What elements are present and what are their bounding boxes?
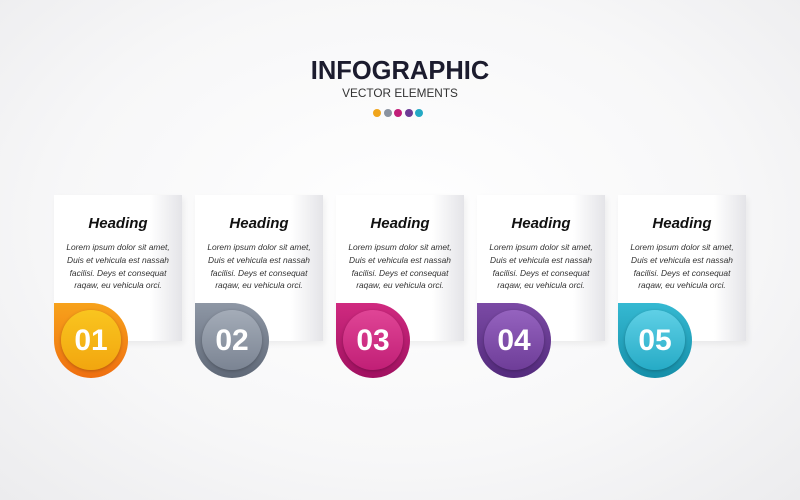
badge: 04: 04	[497, 324, 531, 357]
panel: step 3: Lorem ipsum dolor sit amet,	[348, 242, 452, 252]
panel: step 4: raqaw, eu vehicula orci.	[497, 280, 585, 290]
panel: step 5: Duis et vehicula est nassah	[631, 255, 733, 265]
badge: 01	[54, 303, 128, 378]
panel: step 1: Duis et vehicula est nassah	[67, 255, 169, 265]
panel: step 1: facilisi. Deys et consequat	[70, 268, 166, 278]
panel: step 4: Heading	[511, 215, 571, 232]
panel: step 2: facilisi. Deys et consequat	[211, 268, 307, 278]
panel: step 2: Heading	[229, 215, 289, 232]
panel: step 5	[618, 195, 746, 341]
panel: step 1: Lorem ipsum dolor sit amet,	[66, 242, 170, 252]
panel: step 1: raqaw, eu vehicula orci.	[74, 280, 162, 290]
color dots	[373, 109, 423, 117]
badge: 03: 03	[356, 324, 390, 357]
panel: step 5: facilisi. Deys et consequat	[634, 268, 730, 278]
panel: step 3: raqaw, eu vehicula orci.	[356, 280, 444, 290]
panel: step 2: raqaw, eu vehicula orci.	[215, 280, 303, 290]
badge: 05: 05	[638, 324, 672, 357]
panel: step 5: raqaw, eu vehicula orci.	[638, 280, 726, 290]
badge: 01: 01	[74, 324, 108, 357]
panel: step 2: Lorem ipsum dolor sit amet,	[207, 242, 311, 252]
panel: step 3: Heading	[370, 215, 430, 232]
panel: step 1: Heading	[88, 215, 148, 232]
panel: step 1	[54, 195, 182, 341]
panel: step 4	[477, 195, 605, 341]
badge: 04	[477, 303, 551, 378]
panel: step 2: Duis et vehicula est nassah	[208, 255, 310, 265]
panel: step 5: Lorem ipsum dolor sit amet,	[630, 242, 734, 252]
panel: step 4: Lorem ipsum dolor sit amet,	[489, 242, 593, 252]
panel: step 4: Duis et vehicula est nassah	[490, 255, 592, 265]
panel: step 3	[336, 195, 464, 341]
panel: step 3: Duis et vehicula est nassah	[349, 255, 451, 265]
panel: step 5: Heading	[652, 215, 712, 232]
panel: step 3: facilisi. Deys et consequat	[352, 268, 448, 278]
badge: 03	[336, 303, 410, 378]
badge: 05	[618, 303, 692, 378]
panel: step 2	[195, 195, 323, 341]
title: INFOGRAPHIC	[311, 57, 489, 85]
badge: 02: 02	[215, 324, 249, 357]
badge: 02	[195, 303, 269, 378]
subtitle: VECTOR ELEMENTS	[342, 86, 458, 100]
panel: step 4: facilisi. Deys et consequat	[493, 268, 589, 278]
